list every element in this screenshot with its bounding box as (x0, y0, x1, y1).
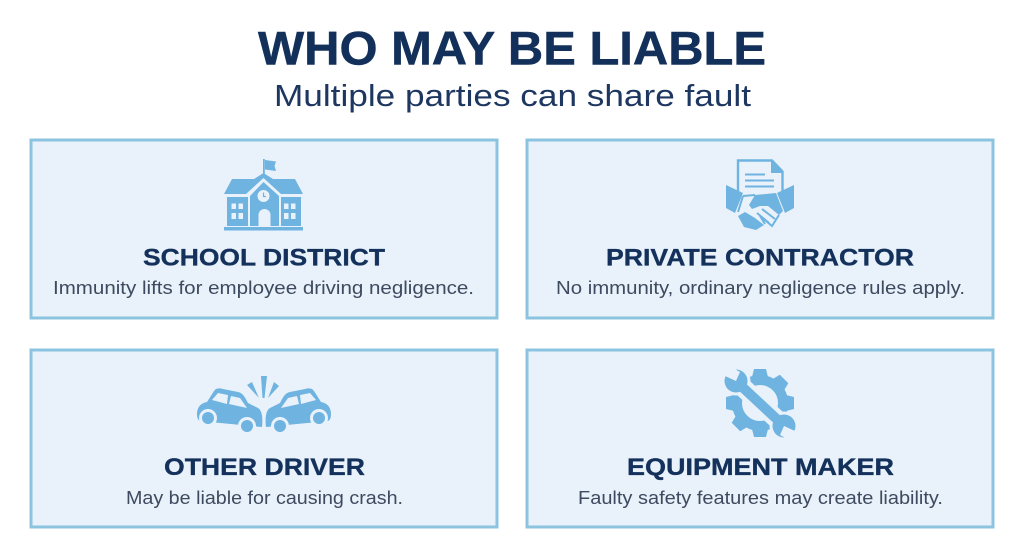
icon: school building (224, 159, 303, 230)
text: other driver: May be liable for causing crash. (126, 488, 403, 508)
heading: equipment maker: EQUIPMENT MAKER (627, 454, 894, 481)
text: equipment maker: Faulty safety features may create liability. (578, 488, 943, 508)
panel: private contractor (527, 140, 993, 318)
panel: school district (31, 140, 497, 318)
icon: gear and wrench (722, 366, 798, 440)
icon: contract and handshake (726, 160, 794, 230)
heading: school district: SCHOOL DISTRICT (143, 244, 385, 272)
title: WHO MAY BE LIABLE (258, 22, 766, 74)
text: private contractor: No immunity, ordinary negligence rules apply. (556, 278, 965, 298)
heading: other driver: OTHER DRIVER (164, 454, 365, 481)
subtitle: Multiple parties can share fault (274, 78, 751, 113)
panel: other driver (31, 350, 497, 527)
text: school district: Immunity lifts for employee driving negligence. (53, 278, 474, 298)
icon: car collision (197, 376, 331, 435)
heading: private contractor: PRIVATE CONTRACTOR (606, 244, 914, 272)
panel: equipment maker (527, 350, 993, 527)
